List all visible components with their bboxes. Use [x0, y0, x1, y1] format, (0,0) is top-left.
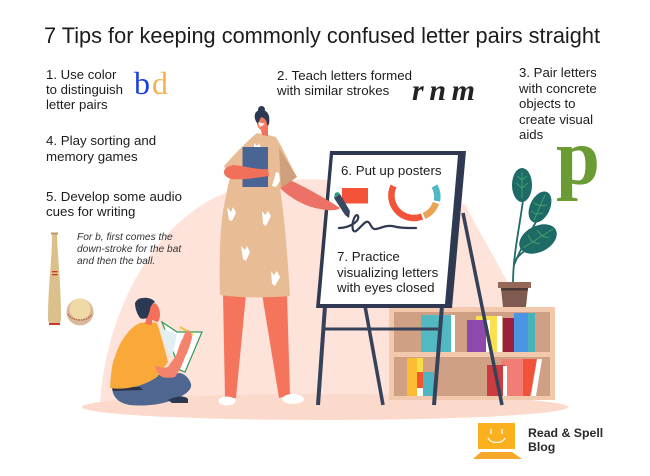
- plant: [498, 168, 562, 307]
- audio cue note: [77, 232, 182, 267]
- poster: red rectangle: [342, 188, 368, 204]
- hair: [135, 298, 155, 319]
- letters b d: [134, 65, 168, 101]
- tip 7: 7. Practice: [337, 249, 400, 264]
- icon: baseball: [66, 298, 94, 326]
- letters b d: b: [134, 65, 150, 101]
- icon: laptop with smile: [473, 423, 522, 459]
- books: lower shelf: [407, 358, 542, 396]
- tip 6: 6. Put up posters: [341, 163, 442, 178]
- belt: [112, 387, 143, 391]
- tip 4: [46, 133, 156, 164]
- jeans: [112, 373, 191, 406]
- arm: [155, 330, 192, 378]
- neck: [260, 124, 268, 136]
- tip 2: 2. Teach letters formed: [277, 68, 412, 83]
- hair bun: [258, 106, 265, 113]
- background blob: [100, 179, 520, 405]
- scribble: [339, 215, 416, 231]
- floor ellipse: [82, 394, 568, 420]
- right arm: [280, 178, 340, 210]
- smile: [258, 122, 265, 127]
- logo text: Blog: [528, 440, 555, 454]
- tip 1: 1. Use color: [46, 67, 117, 82]
- dress prints: [227, 143, 280, 286]
- clipboard: [242, 147, 268, 187]
- letters r n m: r n m: [412, 74, 475, 107]
- hair: [255, 110, 269, 125]
- head: [257, 114, 269, 130]
- audio cue note: For b, first comes the: [77, 232, 173, 243]
- icon: baseball bat: [48, 232, 61, 325]
- tip 3: objects to: [519, 96, 575, 111]
- boy sitting: [110, 298, 202, 406]
- bookshelf: [389, 307, 555, 400]
- pot: [498, 282, 531, 307]
- letters b d: d: [152, 65, 168, 101]
- tip 7: with eyes closed: [336, 280, 435, 295]
- shoe: [168, 396, 188, 403]
- tip 3: with concrete: [518, 81, 597, 96]
- logo text: Read & Spell: [528, 426, 603, 440]
- letter p: p: [556, 114, 600, 202]
- legs: [223, 294, 246, 398]
- logo: [473, 423, 603, 459]
- tip 2: [276, 68, 412, 98]
- tip 3: aids: [519, 127, 544, 142]
- tip 1: letter pairs: [46, 97, 108, 112]
- audio cue note: down-stroke for the bat: [77, 244, 182, 255]
- tip 5: cues for writing: [46, 204, 135, 219]
- tip 2: with similar strokes: [276, 83, 390, 98]
- board: [316, 151, 466, 308]
- tip 7: [336, 249, 439, 295]
- books: upper shelf: [421, 313, 535, 352]
- audio cue note: and then the ball.: [77, 256, 155, 267]
- woman teacher: [218, 106, 340, 406]
- tip 5: [46, 189, 182, 219]
- tip 3: create visual: [519, 112, 593, 127]
- logo text: [528, 426, 603, 454]
- easel: [318, 213, 502, 405]
- dress: [220, 133, 297, 297]
- tip 3: [518, 65, 597, 142]
- poster: donut chart: [391, 186, 437, 218]
- tip 4: memory games: [46, 149, 138, 164]
- title: 7 Tips for keeping commonly confused letter pairs straight: [44, 23, 600, 48]
- tip 1: to distinguish: [46, 82, 123, 97]
- shirt: [110, 322, 168, 389]
- face: [145, 303, 160, 325]
- open book: [160, 322, 202, 372]
- tip 3: 3. Pair letters: [519, 65, 597, 80]
- left arm: [224, 165, 269, 179]
- tip 7: visualizing letters: [337, 265, 439, 280]
- shoes: [218, 396, 236, 406]
- marker pen: [334, 192, 350, 218]
- tip 5: 5. Develop some audio: [46, 189, 182, 204]
- pencil: [180, 327, 193, 335]
- tip 4: 4. Play sorting and: [46, 133, 156, 148]
- tip 1: [46, 67, 123, 112]
